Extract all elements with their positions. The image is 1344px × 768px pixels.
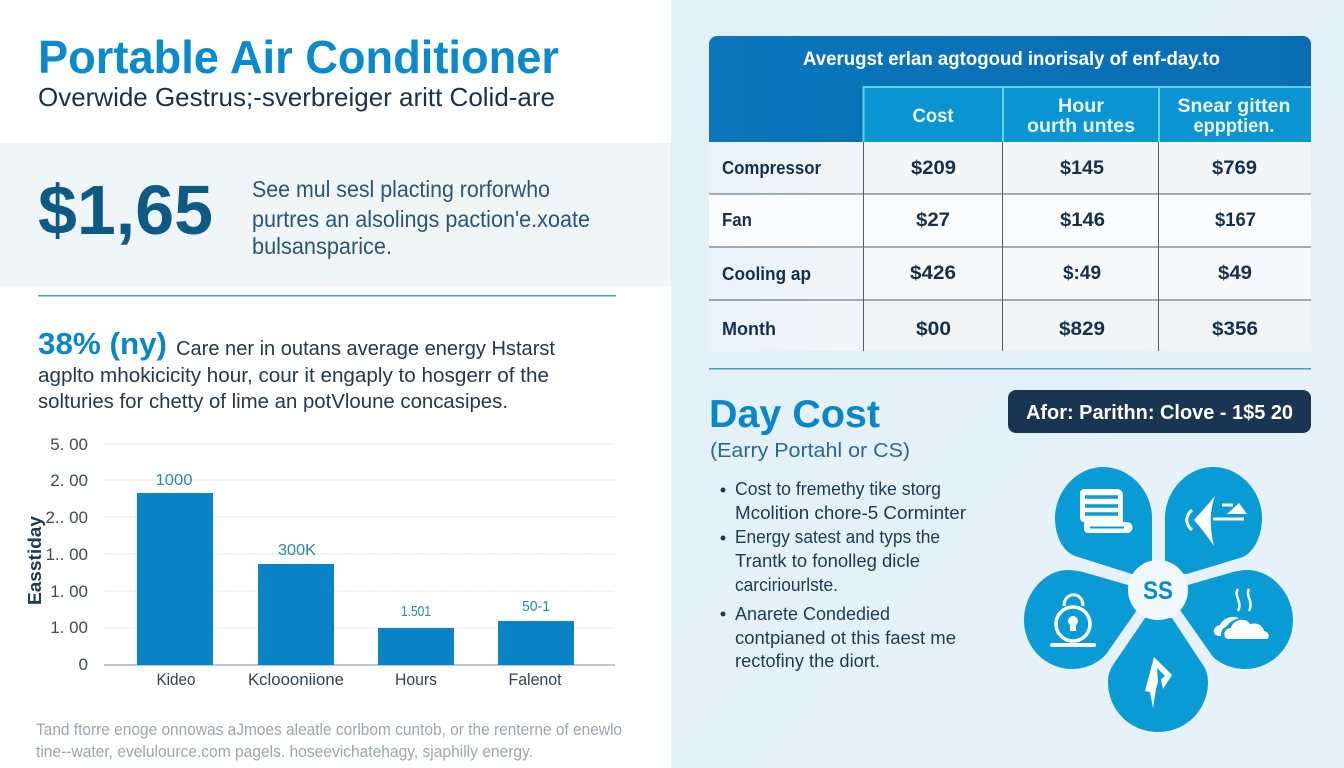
- petal: cloud icon: [1180, 570, 1293, 669]
- table body: [709, 142, 1311, 351]
- row labels: Cooling ap: [722, 264, 811, 284]
- bullet list: Cost to fremethy tike storg: [735, 479, 941, 499]
- table values: $49: [1218, 263, 1252, 284]
- category labels: Hours: [395, 670, 437, 689]
- bars: [137, 493, 574, 665]
- subtitle: Overwide Gestrus;-sverbreiger aritt Colid-are: [38, 82, 555, 112]
- statistic description: See mul sesl placting rorforwho: [252, 176, 550, 202]
- row labels: [722, 158, 821, 339]
- category labels: Kcloooniione: [248, 670, 344, 689]
- bullet list: [720, 479, 966, 671]
- bar chart: [25, 435, 615, 689]
- y axis labels: 2. 00: [50, 471, 88, 490]
- table values: $27: [916, 210, 950, 231]
- category labels: [156, 670, 562, 689]
- bullet list: Energy satest and typs the: [735, 527, 940, 547]
- bullet list: contpianed ot this faest me: [735, 628, 956, 648]
- bullet list: Mcolition chore-5 Corminter: [735, 503, 966, 523]
- table values: $146: [1060, 210, 1105, 231]
- y axis labels: 1. 00: [50, 582, 88, 601]
- bar value labels: 1.501: [401, 603, 431, 620]
- row labels: Compressor: [722, 158, 821, 178]
- bar value labels: 1000: [156, 472, 193, 489]
- big number: $1,65: [38, 171, 213, 249]
- table header: Hour: [1058, 96, 1105, 117]
- subheading: (Earry Portahl or CS): [710, 440, 910, 462]
- table values: $209: [911, 158, 956, 179]
- footnote: [36, 720, 622, 761]
- percentage callout text: agplto mhokicicity hour, cour it engaply to hosgerr of the: [38, 364, 549, 387]
- row labels: Fan: [722, 210, 752, 230]
- bar value labels: 300K: [278, 542, 316, 559]
- bullet list: Trantk to fonolleg dicle: [735, 551, 920, 571]
- statistic description: [252, 176, 590, 259]
- footnote: tine--water, evelulource.com pagels. hoseevichatehagy, sjaphilly energy.: [36, 742, 533, 761]
- percentage callout text: solturies for chetty of lime an potVloune concasipes.: [38, 390, 508, 413]
- bullet list: carciriourlste.: [735, 575, 838, 595]
- cost table: [709, 36, 1311, 351]
- center badge: [1128, 560, 1188, 620]
- category labels: Falenot: [508, 670, 562, 689]
- petal: airflow icon: [1165, 467, 1262, 574]
- table values: $769: [1212, 158, 1257, 179]
- table values: $829: [1059, 319, 1105, 340]
- footnote: Tand ftorre enoge onnowas aJmoes aleatle corlbom cuntob, or the renterne of enewlo: [36, 720, 622, 739]
- y axis labels: [45, 435, 88, 674]
- title: Portable Air Conditioner: [38, 31, 559, 83]
- bullet list: Anarete Condedied: [735, 604, 890, 624]
- table values: $167: [1215, 210, 1256, 231]
- petal diagram: [1024, 467, 1293, 732]
- category labels: Kideo: [156, 670, 196, 689]
- panel: left column: [0, 0, 671, 768]
- table header: Averugst erlan agtogoud inorisaly of enf-day.to: [803, 49, 1220, 70]
- panel: headline statistic band: [0, 143, 671, 286]
- y axis labels: 1.. 00: [45, 545, 88, 564]
- percentage callout text: [38, 326, 555, 413]
- table values: $145: [1060, 158, 1104, 179]
- petal: document icon: [1055, 467, 1152, 574]
- y axis labels: 5. 00: [50, 435, 88, 454]
- table header: Cost: [912, 106, 954, 127]
- table values: $:49: [1063, 263, 1101, 284]
- table values: $00: [916, 319, 951, 340]
- callout: price badge: Afor: Parithn: Clove - 1$5 20: [1026, 402, 1293, 424]
- petal: lock icon: [1024, 570, 1137, 669]
- heading: day cost: Day Cost: [709, 393, 880, 436]
- table values: $426: [910, 263, 956, 284]
- bar value labels: [156, 472, 550, 620]
- y axis title: Easstiday: [25, 516, 45, 605]
- percentage callout text: 38% (ny): [38, 326, 167, 361]
- bar value labels: 50-1: [522, 598, 550, 615]
- table header: eppptien.: [1194, 116, 1274, 137]
- y axis labels: 2.. 00: [45, 508, 88, 527]
- petal: bolt icon: [1108, 618, 1208, 732]
- table header: Snear gitten: [1178, 96, 1290, 117]
- center badge: SS: [1143, 577, 1173, 605]
- callout: price badge: [1008, 390, 1311, 433]
- panel: right column: [671, 0, 1344, 768]
- statistic description: purtres an alsolings paction'e.xoate: [252, 206, 590, 232]
- row labels: Month: [722, 319, 776, 339]
- y axis labels: 1. 00: [50, 618, 88, 637]
- statistic description: bulsansparice.: [252, 233, 392, 259]
- table values: [910, 158, 1258, 340]
- table header: ourth untes: [1027, 116, 1135, 137]
- table values: $356: [1212, 319, 1258, 340]
- bullet list: rectofiny the diort.: [735, 651, 880, 671]
- table header: [709, 36, 1311, 142]
- percentage callout text: Care ner in outans average energy Hstarst: [176, 337, 555, 360]
- y axis labels: 0: [79, 655, 88, 674]
